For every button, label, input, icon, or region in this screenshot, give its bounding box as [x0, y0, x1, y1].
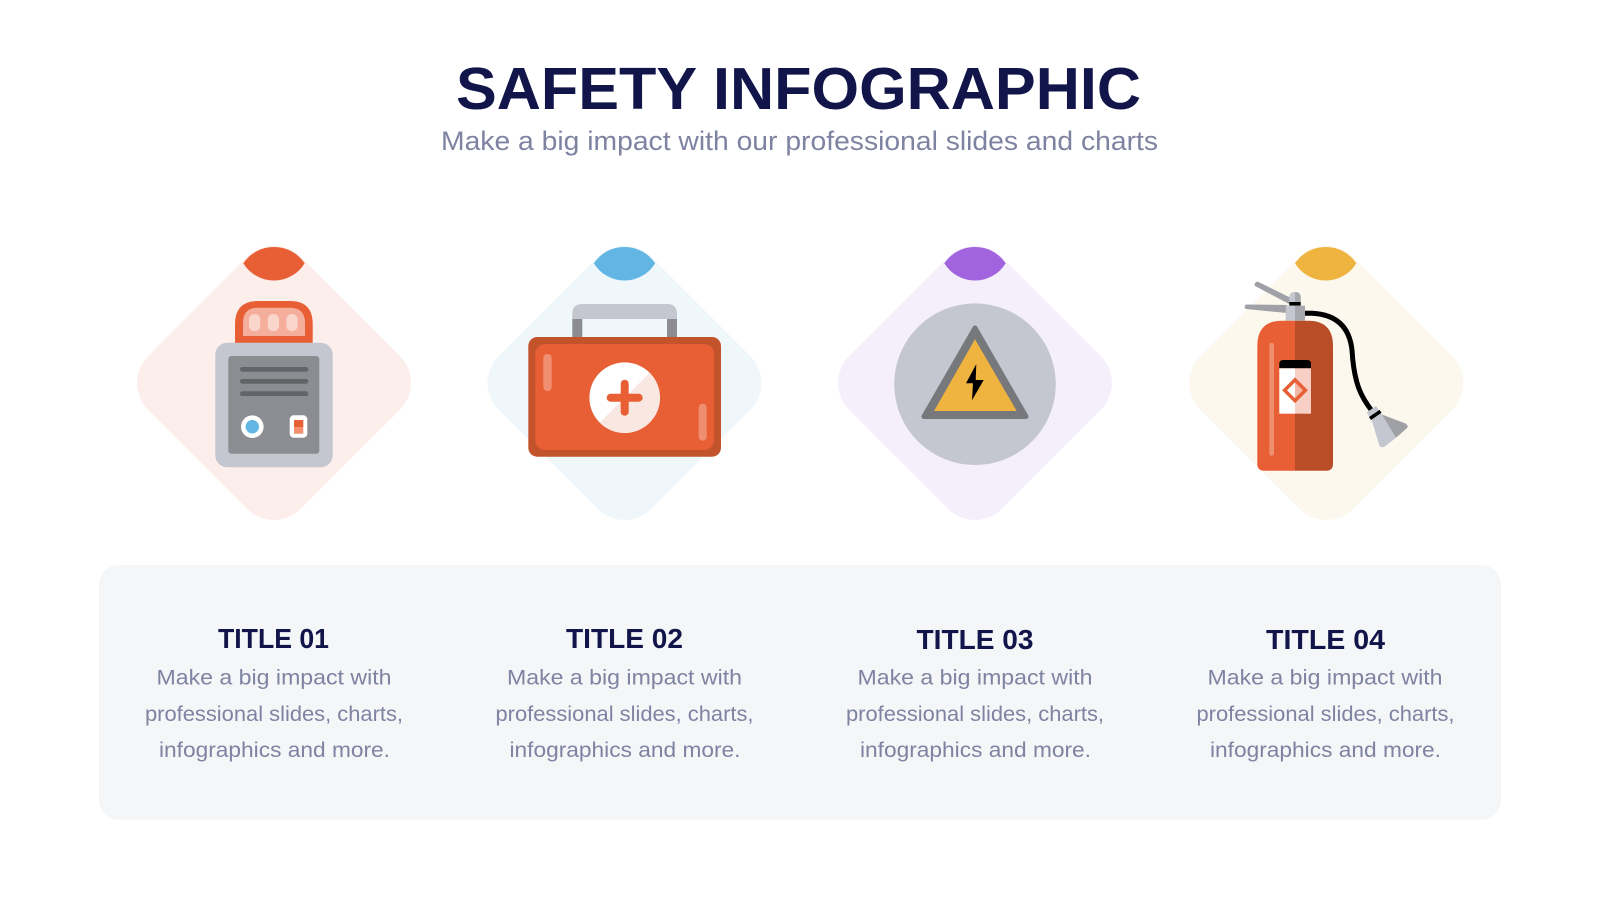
diamond background 3: [822, 230, 1128, 536]
diamond card 3: electrical hazard: [822, 230, 1128, 536]
body text 3: professional slides, charts,: [846, 702, 1104, 726]
body text 4: [1196, 666, 1454, 762]
body text 2: infographics and more.: [510, 738, 740, 762]
diamond card 4: fire extinguisher: [1174, 230, 1479, 536]
body text 1: infographics and more.: [159, 738, 390, 762]
icon: electrical hazard sign: [894, 303, 1056, 465]
icon: fire extinguisher: [1244, 282, 1408, 471]
diamond card 2: first aid kit: [472, 230, 777, 536]
cap 3: [944, 247, 1006, 280]
body text 2: Make a big impact with: [507, 666, 742, 690]
body text 3: infographics and more.: [860, 738, 1091, 762]
body text 2: [496, 666, 754, 762]
diamond background 2: [472, 230, 777, 536]
body text 2: professional slides, charts,: [496, 702, 754, 726]
subtitle: Make a big impact with our professional slides and charts: [441, 126, 1158, 156]
text column 2: [496, 623, 754, 762]
body text 4: Make a big impact with: [1208, 666, 1442, 690]
body text 4: professional slides, charts,: [1196, 702, 1454, 726]
body text 3: Make a big impact with: [858, 666, 1092, 690]
body text 3: [846, 666, 1104, 762]
panel: text background: [99, 565, 1501, 820]
cap 1: [243, 247, 305, 280]
heading 1: TITLE 01: [218, 623, 329, 654]
body text 1: professional slides, charts,: [145, 702, 403, 726]
icon: alarm device: [215, 301, 333, 467]
body text 1: Make a big impact with: [156, 666, 392, 690]
cap 4: [1295, 247, 1356, 280]
body text 4: infographics and more.: [1210, 738, 1441, 762]
diamond background 4: [1174, 230, 1479, 536]
heading 2: TITLE 02: [566, 623, 683, 654]
heading 3: TITLE 03: [916, 624, 1034, 655]
cap 2: [594, 247, 655, 280]
title: SAFETY INFOGRAPHIC: [456, 56, 1141, 122]
icon: first aid kit: [528, 304, 721, 457]
text column 3: [846, 624, 1104, 762]
diamond card 1: alarm device: [121, 230, 427, 536]
heading 4: TITLE 04: [1266, 624, 1386, 655]
body text 1: [145, 666, 403, 762]
diamond background 1: [121, 230, 427, 536]
text column 1: [145, 623, 403, 762]
text column 4: [1196, 624, 1454, 762]
